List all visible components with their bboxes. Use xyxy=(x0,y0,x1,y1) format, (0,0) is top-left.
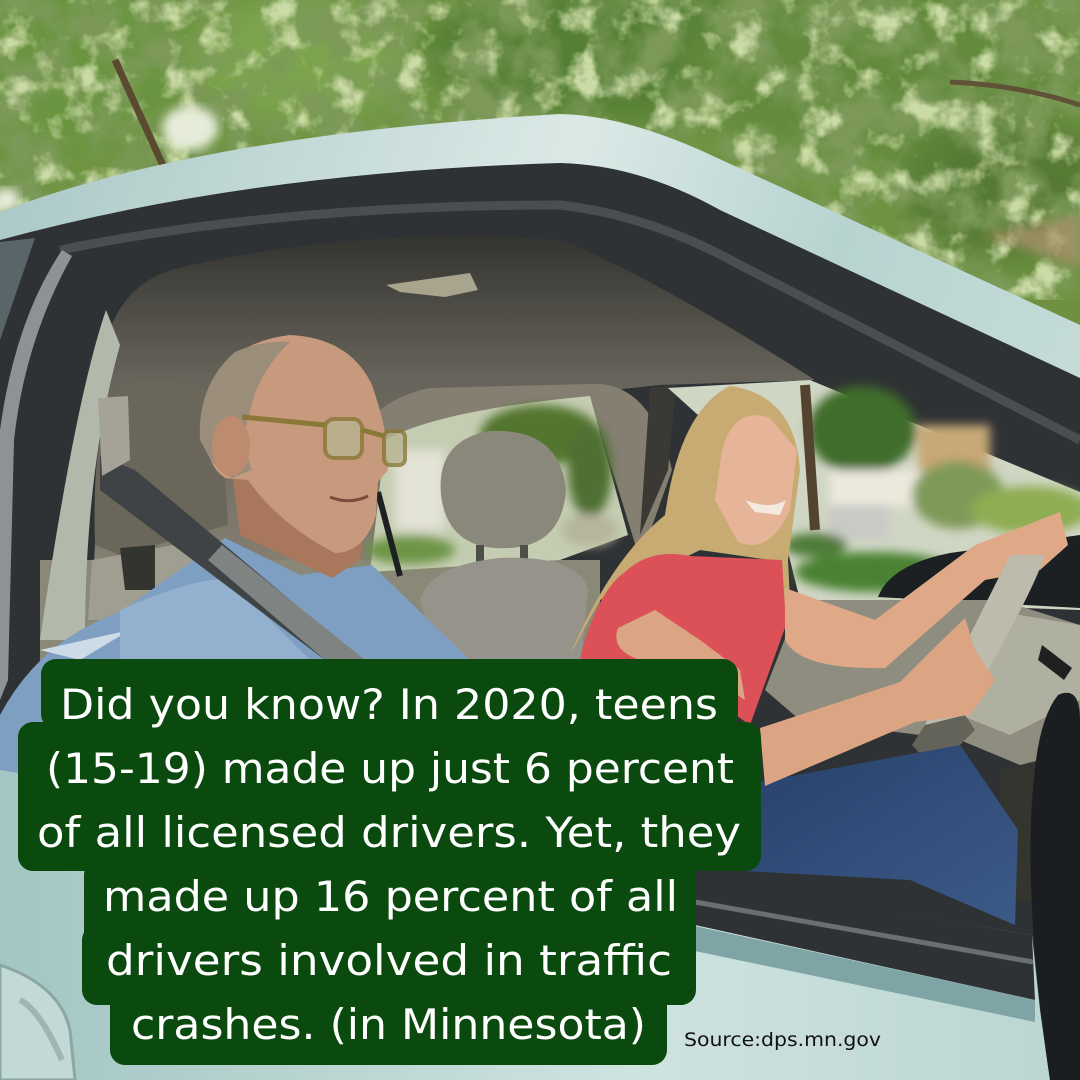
car door and window sill xyxy=(0,770,1050,1080)
steering wheel xyxy=(912,555,1044,770)
face xyxy=(715,415,797,545)
callout text: crashes. (in Minnesota) xyxy=(131,1000,646,1049)
shirt xyxy=(0,538,470,790)
steering dashboard and door panel xyxy=(765,600,1080,900)
callout text xyxy=(37,680,741,1049)
rear window view xyxy=(365,396,628,576)
passenger headrest and seats xyxy=(88,381,588,670)
seat belt xyxy=(100,456,362,660)
left arm xyxy=(785,512,1068,668)
driver: teen with blonde hair xyxy=(570,386,1068,725)
callout text: drivers involved in traffic xyxy=(106,936,672,985)
source credit: Source:dps.mn.gov xyxy=(684,1029,881,1051)
driver's right arm and jeans xyxy=(725,618,1018,925)
neck xyxy=(232,470,370,578)
head xyxy=(207,335,388,553)
callout text: of all licensed drivers. Yet, they xyxy=(37,808,741,857)
background: tree canopy xyxy=(0,0,1080,300)
glasses xyxy=(325,419,362,458)
side window view xyxy=(668,380,1080,610)
car interior: ceiling and cabin xyxy=(40,236,815,680)
passenger: man with glasses xyxy=(0,335,470,790)
side mirror xyxy=(1030,693,1080,1080)
hair xyxy=(200,342,290,478)
back hair xyxy=(570,386,800,655)
callout text: Did you know? In 2020, teens xyxy=(60,680,718,729)
callout background xyxy=(18,659,761,1065)
callout text: made up 16 percent of all xyxy=(103,872,678,921)
shirt xyxy=(580,554,786,725)
callout text: (15-19) made up just 6 percent xyxy=(46,744,734,793)
callout: teen crash statistic xyxy=(18,659,761,1065)
